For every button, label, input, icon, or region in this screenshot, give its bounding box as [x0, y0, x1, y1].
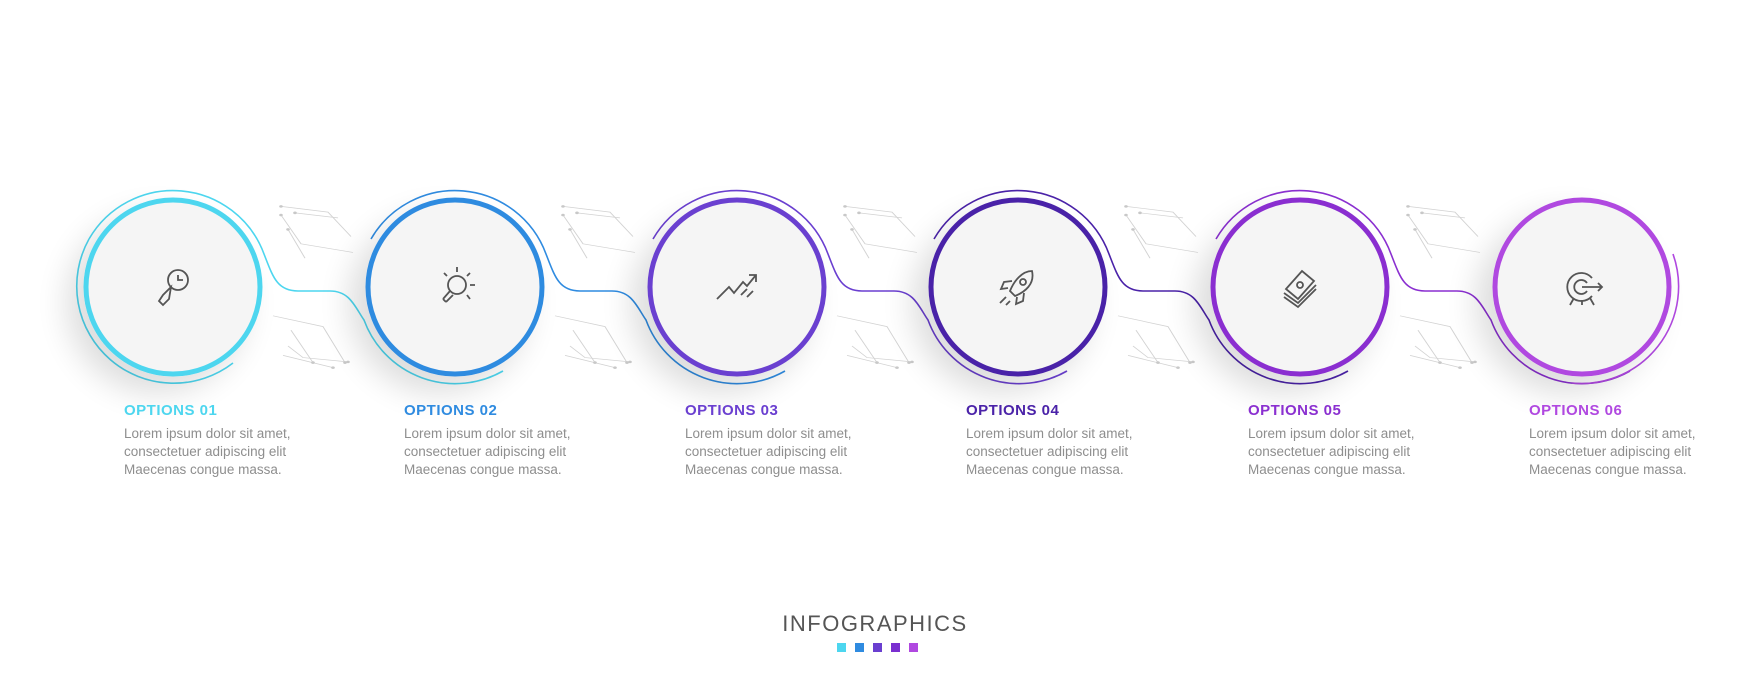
option 3 text: consectetuer adipiscing elit — [685, 444, 847, 459]
option 1 text: OPTIONS 01 — [124, 402, 217, 419]
icon: search clock — [159, 270, 188, 305]
option 1 text: consectetuer adipiscing elit — [124, 444, 286, 459]
connectors — [77, 191, 1679, 384]
option 6 text: consectetuer adipiscing elit — [1529, 444, 1691, 459]
circle 2 — [368, 200, 542, 374]
option 4 text — [966, 402, 1133, 477]
icon: rocket — [1000, 271, 1033, 305]
option 6 text: OPTIONS 06 — [1529, 402, 1622, 419]
option 6 text: Lorem ipsum dolor sit amet, — [1529, 426, 1696, 441]
option 6 text — [1529, 402, 1696, 477]
option 4 text: OPTIONS 04 — [966, 402, 1059, 419]
option 3 text — [685, 402, 852, 477]
option 4 text: Maecenas congue massa. — [966, 462, 1124, 477]
icon: growth — [717, 275, 756, 299]
option 2 text: OPTIONS 02 — [404, 402, 497, 419]
option 2 text: consectetuer adipiscing elit — [404, 444, 566, 459]
option 2 text: Lorem ipsum dolor sit amet, — [404, 426, 571, 441]
option 2 text — [404, 402, 571, 477]
icon: bulb — [443, 267, 475, 302]
option 1 text — [124, 402, 291, 477]
option 3 text: Lorem ipsum dolor sit amet, — [685, 426, 852, 441]
circle 1 — [86, 200, 260, 374]
option 3 text: Maecenas congue massa. — [685, 462, 843, 477]
option 5 text: Maecenas congue massa. — [1248, 462, 1406, 477]
icon: target — [1567, 273, 1602, 305]
option 1 text: Lorem ipsum dolor sit amet, — [124, 426, 291, 441]
option 5 text: Lorem ipsum dolor sit amet, — [1248, 426, 1415, 441]
option 2 text: Maecenas congue massa. — [404, 462, 562, 477]
circle 5 — [1213, 200, 1387, 374]
option 4 text: consectetuer adipiscing elit — [966, 444, 1128, 459]
circle 4 — [931, 200, 1105, 374]
footer title: INFOGRAPHICS — [782, 611, 968, 636]
option 6 text: Maecenas congue massa. — [1529, 462, 1687, 477]
option 5 text: consectetuer adipiscing elit — [1248, 444, 1410, 459]
icon: money — [1284, 271, 1316, 307]
option 5 text: OPTIONS 05 — [1248, 402, 1341, 419]
circle 3 — [650, 200, 824, 374]
option 1 text: Maecenas congue massa. — [124, 462, 282, 477]
option 4 text: Lorem ipsum dolor sit amet, — [966, 426, 1133, 441]
option 5 text — [1248, 402, 1415, 477]
circuit decorations — [273, 205, 1480, 369]
circle 6 — [1495, 200, 1669, 374]
footer color squares — [837, 643, 918, 652]
option 3 text: OPTIONS 03 — [685, 402, 778, 419]
